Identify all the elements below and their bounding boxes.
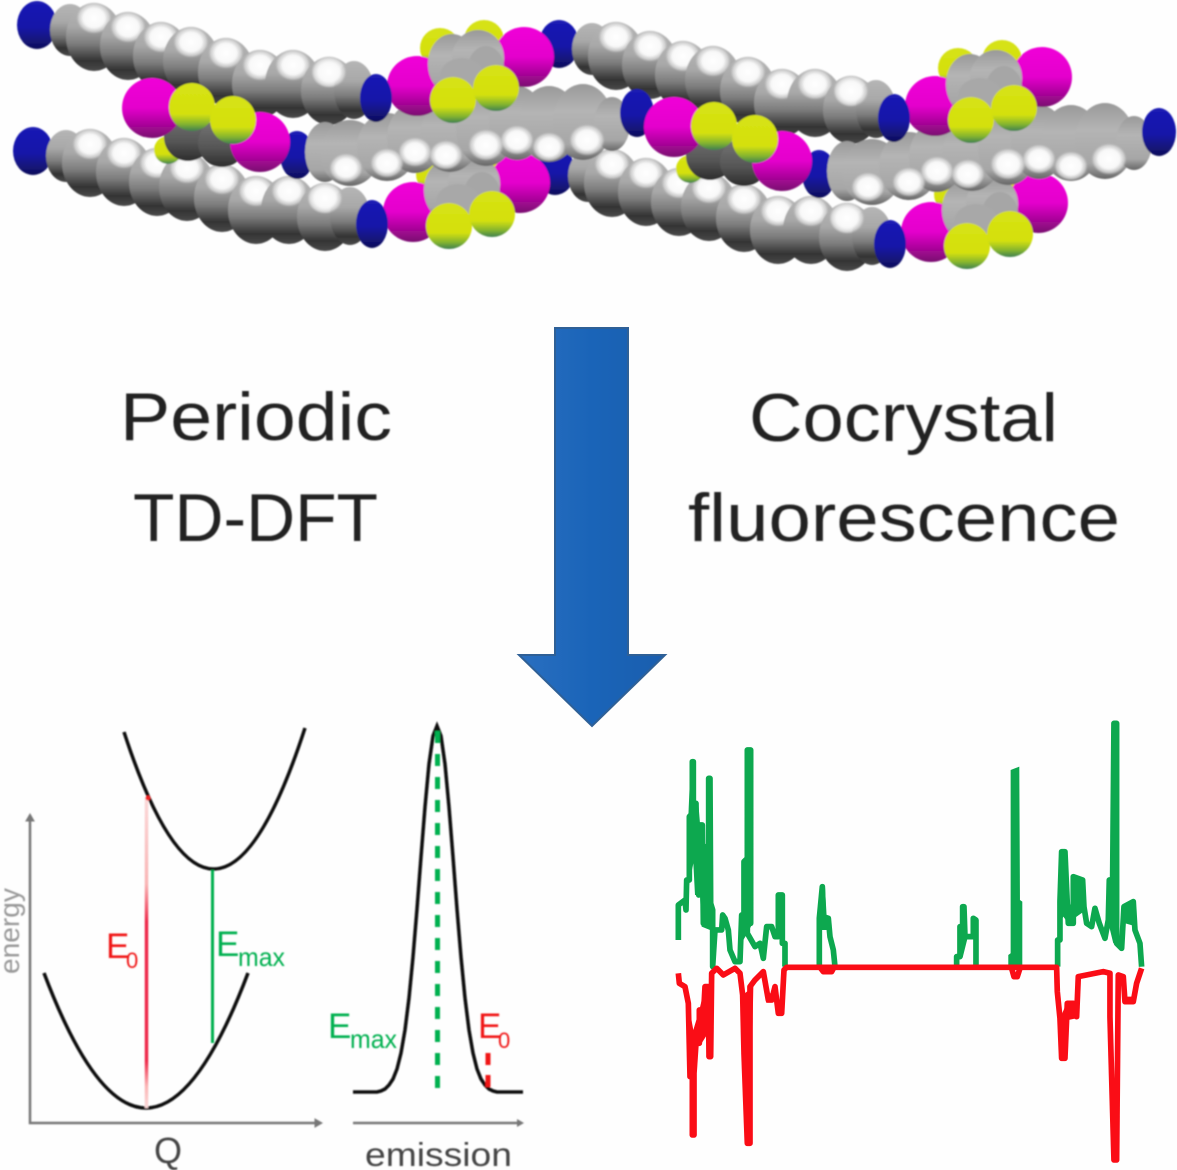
label: Emax: max: [238, 942, 285, 972]
red transition line: [145, 797, 148, 1108]
middle molecular chain right: [802, 103, 1176, 205]
emission axis: [353, 1122, 520, 1124]
ground state curve: [44, 973, 248, 1108]
heading: Cocrystal fluorescence: Cocrystal: [749, 380, 1058, 456]
middle cluster right: [644, 97, 812, 191]
top cluster left: [360, 20, 554, 123]
chart: emission band: [328, 726, 524, 1170]
axes: [26, 814, 322, 1127]
green dashed line: [435, 731, 440, 1096]
green transition line: [211, 870, 214, 1043]
heading: Periodic TD-DFT: [120, 379, 392, 556]
label: Emax: max: [350, 1024, 397, 1054]
label: Emax: E: [328, 1007, 351, 1046]
heading: Periodic TD-DFT: TD-DFT: [133, 480, 378, 556]
excited state curve: [124, 728, 305, 869]
top molecular chain left: [17, 1, 374, 125]
bottom cluster right: [874, 166, 1068, 269]
bottom molecular chain left: [13, 127, 370, 251]
arrow: down: [519, 328, 665, 726]
green trace: [678, 723, 1142, 967]
label: Emax: [216, 925, 285, 972]
middle molecular chain left: [280, 84, 654, 186]
red dot: [146, 796, 150, 800]
label: E0: E: [106, 927, 129, 966]
red filled regions: [688, 987, 1135, 1143]
label: E0: [106, 927, 138, 973]
label: E0: E: [478, 1007, 501, 1046]
red trace: [678, 967, 1142, 1160]
label: E0: [478, 1007, 510, 1053]
chart: fluorescence spectrum: [678, 723, 1142, 1160]
axis label: Q: Q: [154, 1130, 182, 1170]
middle cluster left: [122, 78, 290, 172]
label: E0: 0: [126, 948, 138, 973]
emission peak curve: [353, 726, 523, 1092]
heading: Periodic TD-DFT: Periodic: [120, 379, 392, 455]
bottom molecular chain right: [535, 147, 892, 271]
top cluster right: [878, 40, 1072, 143]
heading: Cocrystal fluorescence: [688, 380, 1120, 556]
top molecular chain right: [539, 20, 896, 144]
red dashed line: [486, 1053, 490, 1088]
heading: Cocrystal fluorescence: fluorescence: [688, 480, 1120, 556]
label: Emax: E: [216, 925, 239, 964]
label: E0: 0: [498, 1028, 510, 1053]
molecular stack illustration: [13, 1, 1176, 271]
bottom cluster left: [356, 146, 550, 249]
green filled regions: [688, 723, 1137, 967]
chart: potential energy curves: [0, 728, 322, 1170]
label: Emax: [328, 1007, 397, 1054]
